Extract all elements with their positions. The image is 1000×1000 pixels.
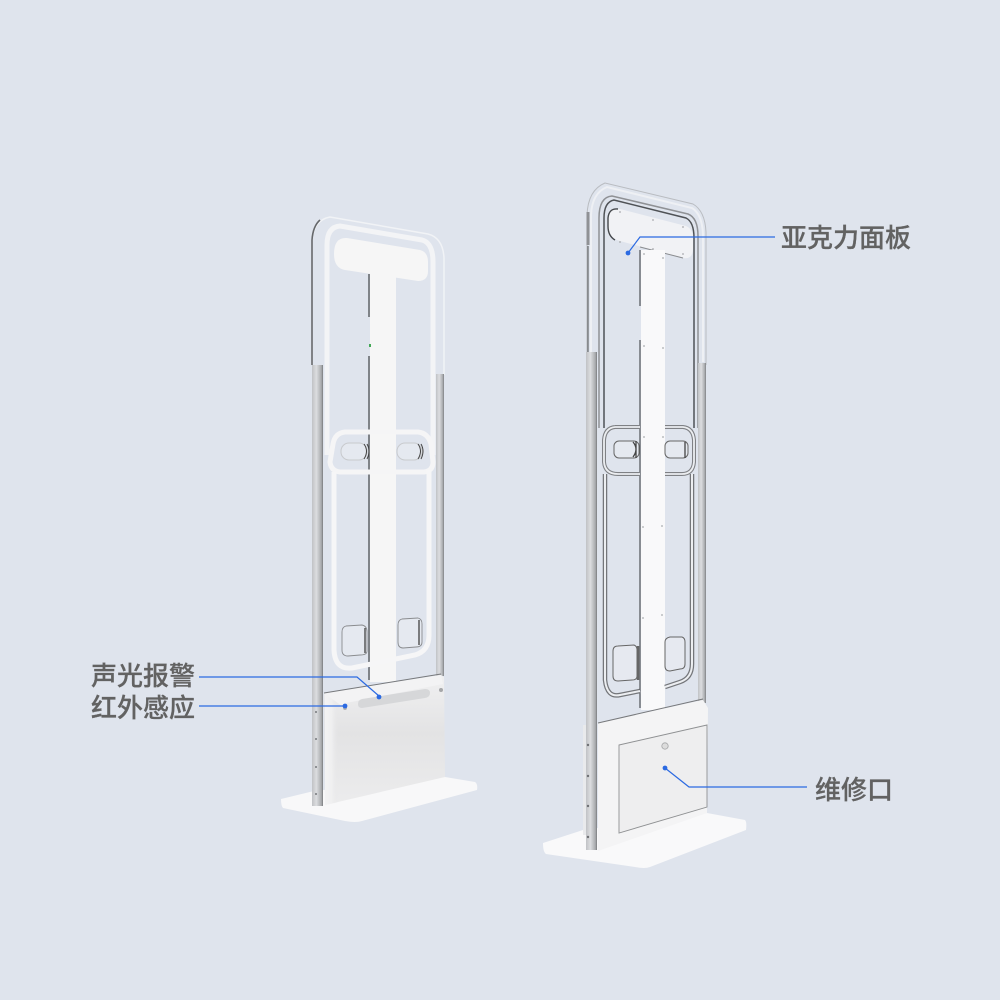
right panel rivets xyxy=(619,211,684,619)
left cabinet top bevel xyxy=(324,675,443,706)
left T panel head xyxy=(334,238,428,281)
callout: 亚克力面板 xyxy=(626,223,911,255)
right post xyxy=(436,374,444,676)
right stand left post xyxy=(586,352,597,850)
right lower hole shadow xyxy=(637,646,639,680)
right panel frame xyxy=(599,196,698,428)
left lower ring xyxy=(334,470,429,668)
left gate stand xyxy=(281,217,477,822)
right T panel head xyxy=(608,209,693,258)
right dark line xyxy=(639,250,641,708)
callout: 红外感应 xyxy=(91,693,347,723)
right base plate xyxy=(543,813,746,868)
right panel textured edge xyxy=(586,212,590,245)
right cabinet xyxy=(598,700,708,851)
left panel dark edge xyxy=(312,220,320,365)
left cabinet xyxy=(324,675,445,805)
left sensor dots xyxy=(343,706,347,710)
right gate stand xyxy=(543,183,746,868)
callout: 维修口 xyxy=(663,766,893,805)
left green indicator xyxy=(369,344,371,347)
left base plate xyxy=(281,777,477,822)
right lower ring xyxy=(605,474,692,695)
cabinet top edge xyxy=(324,674,441,693)
right panel white edge xyxy=(591,187,703,362)
left bracket holes xyxy=(341,443,422,460)
left lower holes xyxy=(342,618,422,656)
right bracket holes xyxy=(614,441,688,458)
maintenance door xyxy=(619,725,707,833)
callout: 声光报警: 声光报警 xyxy=(91,661,195,691)
right acrylic panel outline xyxy=(587,183,706,365)
callout: 维修口: 维修口 xyxy=(815,775,893,805)
right bracket hole shadows xyxy=(633,441,685,458)
left cabinet side strip xyxy=(325,693,370,805)
left bracket hole shadows xyxy=(364,444,423,459)
door lock xyxy=(662,743,668,749)
right stand post screws xyxy=(587,744,589,838)
right lower holes xyxy=(613,637,685,681)
left acrylic panel outline xyxy=(312,217,444,375)
right T panel stem xyxy=(641,250,665,710)
left dark line xyxy=(368,274,370,680)
callout: 红外感应: 红外感应 xyxy=(91,693,195,723)
left lower hole shadows xyxy=(365,620,419,653)
left bracket xyxy=(330,432,433,472)
left outer white ring xyxy=(327,226,433,455)
left post screws xyxy=(315,711,317,795)
right bracket xyxy=(604,427,694,474)
left post xyxy=(312,365,323,806)
cabinet top edge xyxy=(598,699,703,723)
right stand cover strip xyxy=(583,725,586,835)
left T panel stem xyxy=(370,272,396,682)
left speaker vent xyxy=(358,689,430,708)
callout: 亚克力面板: 亚克力面板 xyxy=(781,223,911,253)
callout: 声光报警 xyxy=(91,661,381,699)
right stand right post xyxy=(698,363,706,703)
right T head dark edge xyxy=(608,209,618,240)
